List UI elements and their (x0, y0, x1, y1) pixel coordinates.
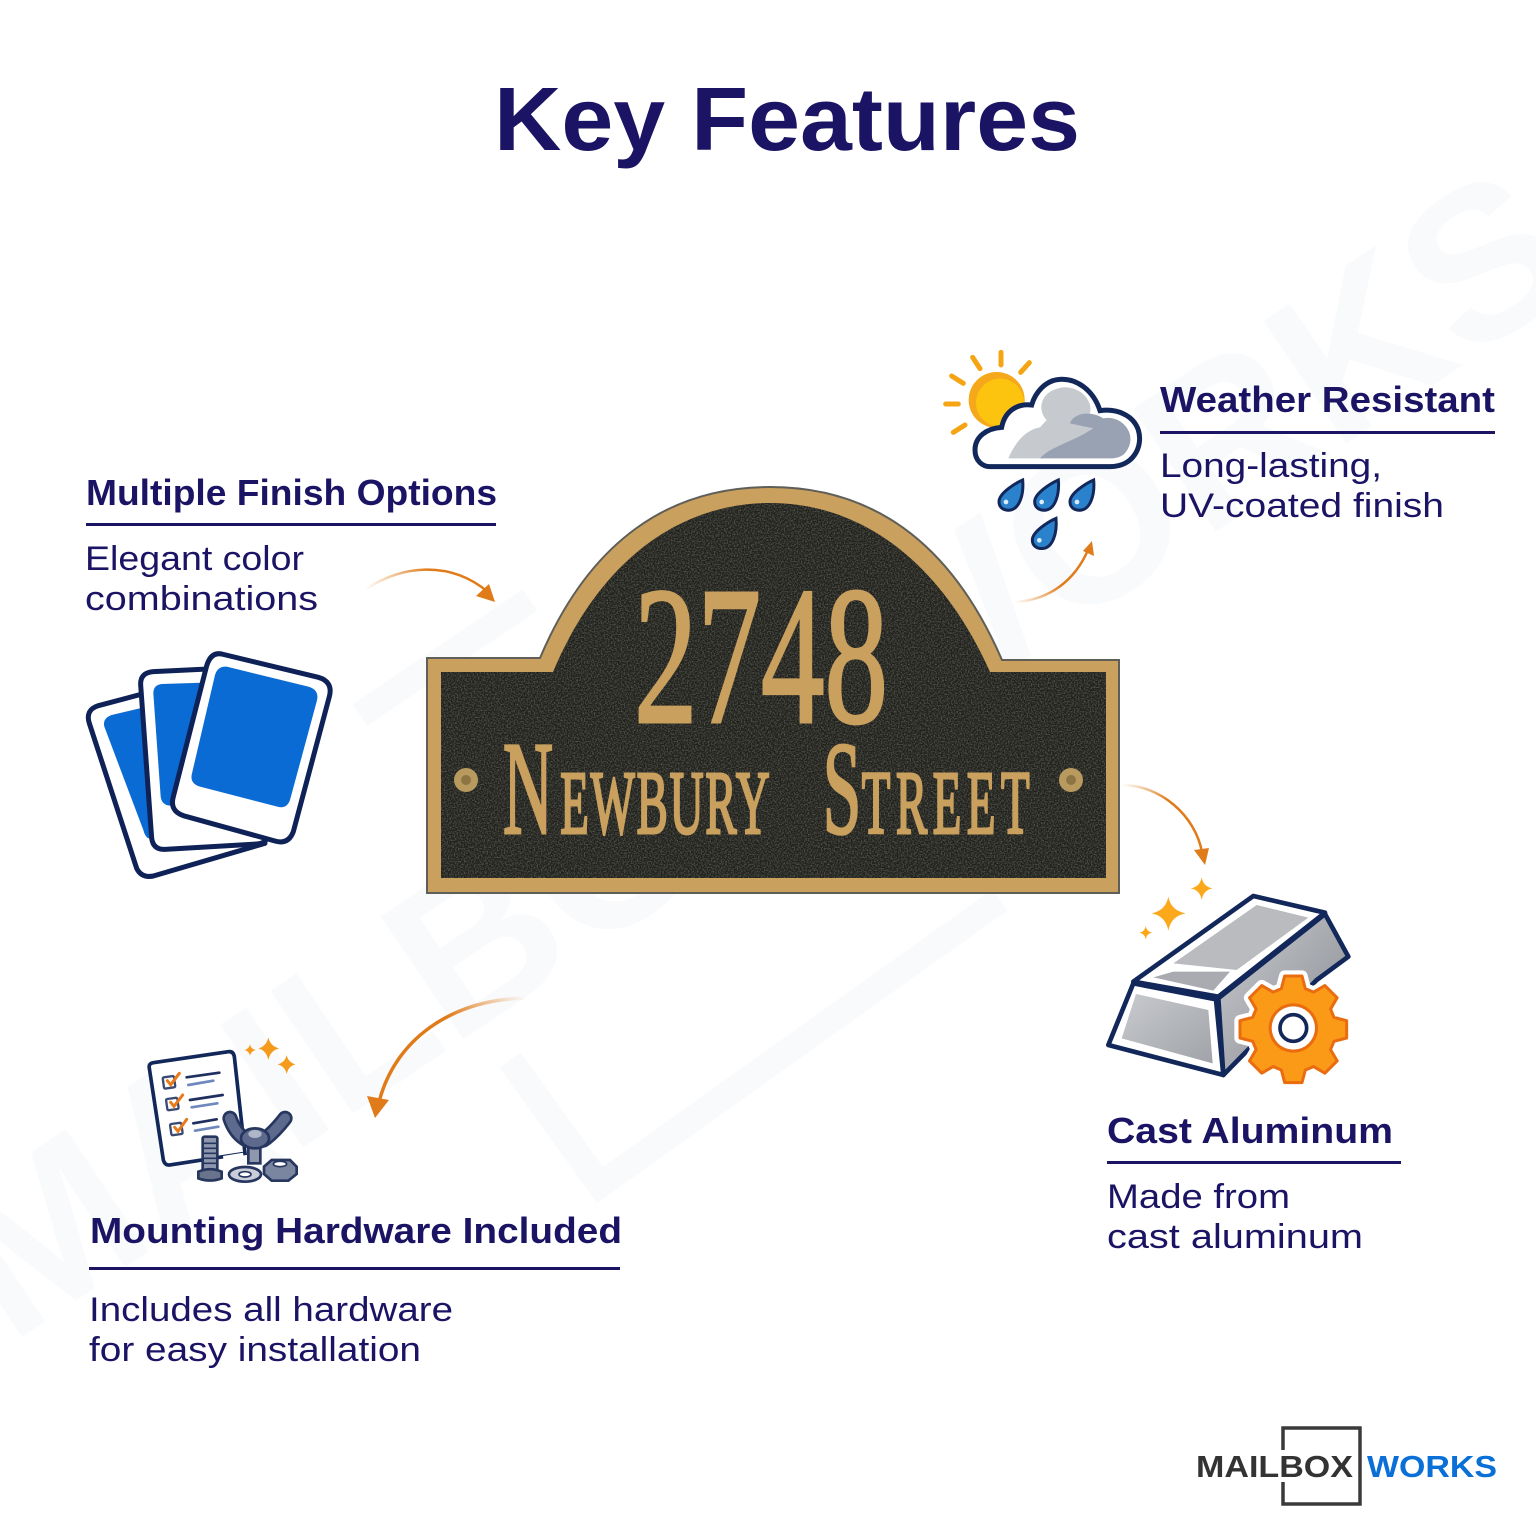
icon: color swatch cards (88, 654, 330, 876)
panel: mounting hardware (89, 1037, 622, 1369)
icon: checklist and hardware (149, 1037, 297, 1182)
heading: cast aluminum: Cast Aluminum (1107, 1110, 1393, 1151)
text: elegant color combinations: Elegant color (85, 540, 304, 578)
logo: mailbox works: WORKS (1367, 1449, 1497, 1484)
text: elegant color combinations: combinations (85, 580, 318, 618)
plaque: street name: TREET (862, 753, 1035, 853)
text: long-lasting finish: Long-lasting, (1160, 447, 1382, 485)
plaque: black field (441, 503, 1106, 878)
panel: weather resistant (946, 352, 1495, 549)
icon: sun cloud and rain (946, 352, 1140, 549)
underline: weather resistant (1160, 431, 1495, 434)
text: long-lasting finish: UV-coated finish (1160, 487, 1444, 525)
text: includes all hardware (89, 1291, 453, 1369)
text: made from cast aluminum: Made from (1107, 1178, 1290, 1216)
text: elegant color combinations (85, 540, 318, 618)
text: made from cast aluminum: cast aluminum (1107, 1218, 1363, 1256)
arrow: plaque to hardware (367, 998, 525, 1118)
plaque (427, 487, 1119, 893)
plaque: street name: S (823, 715, 861, 862)
plaque: gold frame (427, 487, 1119, 893)
title: Key Features (494, 70, 1080, 170)
panel: cast aluminum (1107, 877, 1401, 1256)
arrow: finish options to plaque (365, 570, 495, 602)
plaque: right screw (1059, 768, 1083, 792)
underline: multiple finish options (86, 523, 496, 526)
text: includes all hardware: for easy installation (89, 1331, 421, 1369)
plaque: street name: EWBURY (560, 753, 772, 853)
underline: cast aluminum (1107, 1161, 1401, 1164)
heading: multiple finish options: Multiple Finish Options (86, 472, 497, 513)
plaque: left screw (454, 768, 478, 792)
icon: aluminum ingot and gear (1108, 877, 1348, 1083)
heading: weather resistant: Weather Resistant (1160, 379, 1495, 420)
arrow: plaque to weather (1015, 541, 1094, 602)
plaque: number 2748: 2748 (634, 546, 888, 765)
underline: mounting hardware (89, 1267, 620, 1270)
logo: mailbox works (1196, 1428, 1497, 1504)
text: includes all hardware: Includes all hardware (89, 1291, 453, 1329)
text: long-lasting finish (1160, 447, 1444, 525)
arrow: plaque to aluminum (1122, 785, 1209, 865)
logo: mailbox works: MAILBOX (1196, 1449, 1353, 1484)
text: made from cast aluminum (1107, 1178, 1363, 1256)
panel: multiple finish options (85, 472, 497, 876)
plaque: street name: N (503, 715, 553, 862)
heading: mounting hardware included: Mounting Hardware Included (90, 1210, 622, 1251)
